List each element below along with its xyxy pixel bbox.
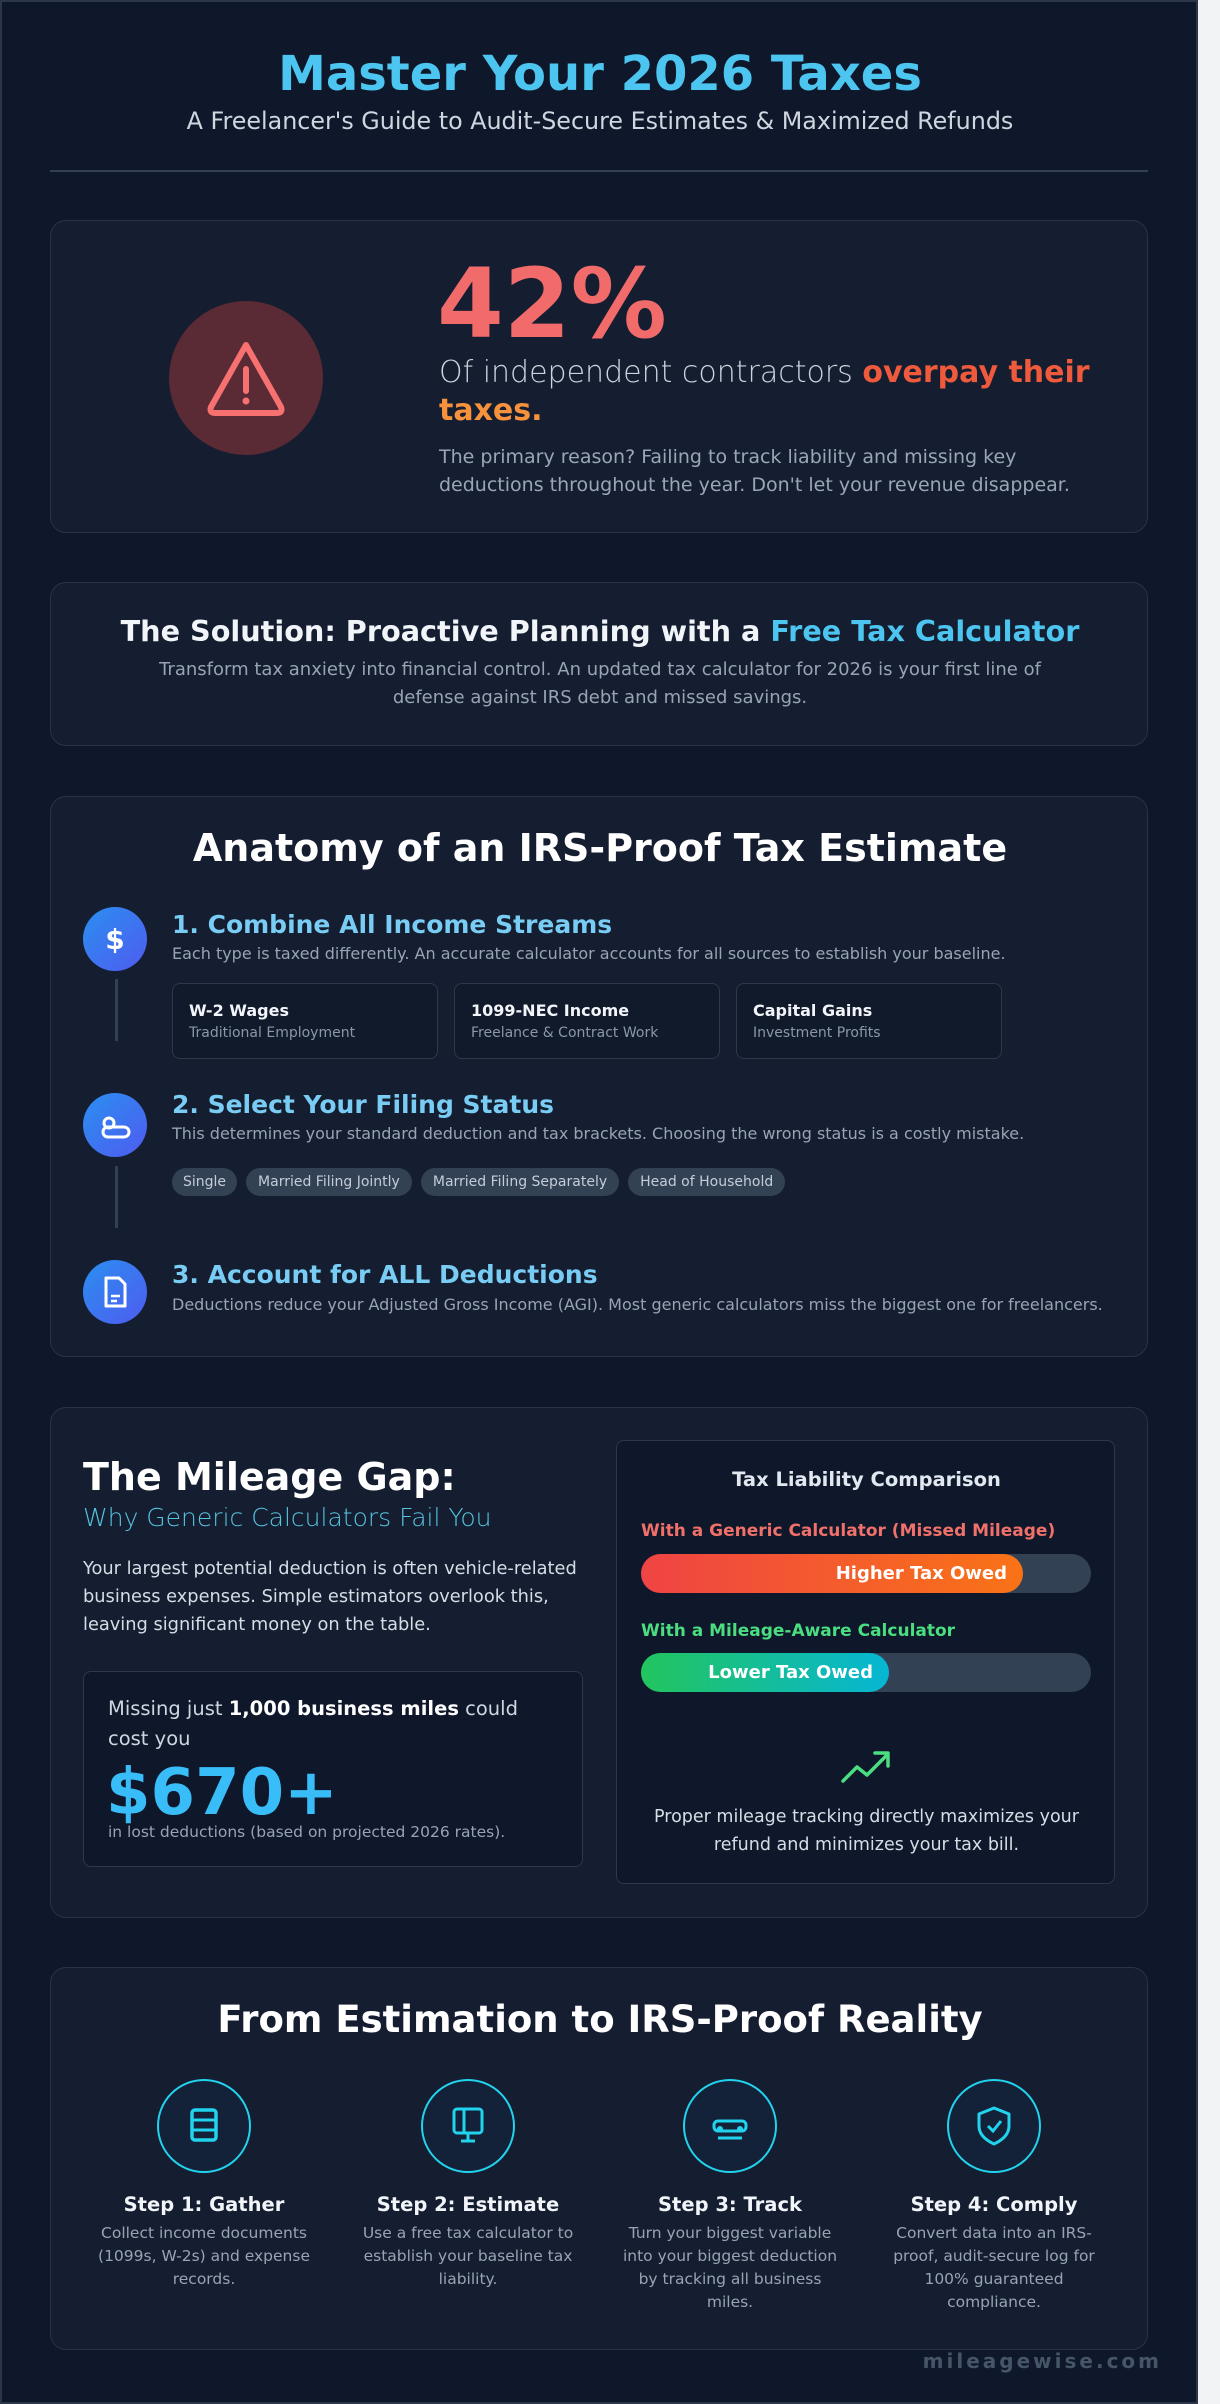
step: gather: Step 1: Gather — [124, 2193, 284, 2216]
pills — [172, 1168, 785, 1196]
step 1 — [83, 907, 1006, 1059]
step: estimate: Use a free tax calculator to establish your baseline tax liability. — [363, 2224, 573, 2288]
icon: warning — [169, 301, 323, 455]
step 3 — [83, 1260, 1103, 1324]
step: comply: Convert data into an IRS-proof, audit-secure log for 100% guaranteed compliance. — [893, 2224, 1095, 2311]
box: W-2: Traditional Employment — [189, 1025, 355, 1041]
box: 1099: Freelance & Contract Work — [471, 1025, 658, 1041]
pills: Married Filing Jointly — [258, 1174, 400, 1190]
box: 1099 — [454, 983, 720, 1059]
mileage subheading: Why Generic Calculators Fail You — [83, 1503, 491, 1532]
heading: 3. Account for ALL Deductions — [172, 1260, 598, 1289]
description: Deductions reduce your Adjusted Gross Income (AGI). Most generic calculators miss the biggest one for freelancers. — [172, 1295, 1103, 1314]
callout: $670: Missing just 1,000 business miles could cost you — [108, 1697, 518, 1750]
chart: tax liability comparison: Proper mileage tracking directly maximizes your refund and minimizes your tax bill. — [654, 1807, 1079, 1855]
bar: lower: Lower Tax Owed — [708, 1662, 873, 1683]
pills: Single — [183, 1174, 226, 1190]
pills: Head of Household — [640, 1174, 773, 1190]
panel: mileage gap — [50, 1407, 1148, 1918]
step: gather — [98, 2079, 310, 2288]
step: estimate: Step 2: Estimate — [377, 2193, 559, 2216]
box: 1099: 1099-NEC Income — [471, 1001, 629, 1020]
panel: steps — [50, 1967, 1148, 2350]
callout: $670: in lost deductions (based on projected 2026 rates). — [108, 1823, 505, 1841]
bar: higher — [641, 1554, 1091, 1593]
heading: 1. Combine All Income Streams — [172, 910, 612, 939]
bar: higher: Higher Tax Owed — [836, 1563, 1007, 1584]
watermark: mileagewise.com — [923, 2349, 1162, 2373]
step: comply: Step 4: Comply — [911, 2193, 1077, 2216]
icon: income: $ — [105, 923, 125, 956]
steps heading: From Estimation to IRS-Proof Reality — [217, 1998, 983, 2041]
mileage heading: The Mileage Gap: — [83, 1455, 456, 1499]
panel: anatomy — [50, 796, 1148, 1357]
icon: trend up — [841, 1751, 890, 1783]
box: capital gains: Capital Gains — [753, 1001, 872, 1020]
icon: income — [83, 907, 147, 971]
panel: solution — [50, 582, 1148, 746]
callout: $670 — [83, 1671, 583, 1867]
subtitle: A Freelancer's Guide to Audit-Secure Estimates & Maximized Refunds — [187, 107, 1013, 135]
step: estimate — [363, 2079, 573, 2288]
description: This determines your standard deduction and tax brackets. Choosing the wrong status is a costly mistake. — [172, 1124, 1024, 1143]
heading: 2. Select Your Filing Status — [172, 1090, 554, 1119]
chart: tax liability comparison — [616, 1440, 1115, 1884]
stat paragraph: The primary reason? Failing to track liability and missing key deductions throughout the year. Don't let your revenue disappear. — [439, 446, 1070, 496]
anatomy heading: Anatomy of an IRS-Proof Tax Estimate — [193, 826, 1007, 870]
chart: tax liability comparison: With a Mileage-Aware Calculator — [641, 1621, 955, 1641]
bar: lower — [641, 1653, 1091, 1692]
box: W-2: W-2 Wages — [189, 1001, 289, 1020]
callout: $670: $670+ — [106, 1756, 338, 1830]
stat: 42%: 42% — [437, 248, 667, 360]
box: capital gains: Investment Profits — [753, 1025, 881, 1041]
icon: document — [83, 1260, 147, 1324]
mileage paragraph: Your largest potential deduction is often vehicle-related business expenses. Simple estimators overlook this, leaving significant money on the table. — [83, 1558, 577, 1635]
solution heading: The Solution: Proactive Planning with a Free Tax Calculator — [121, 614, 1079, 648]
step: track: Turn your biggest variable into your biggest deduction by tracking all business miles. — [623, 2224, 837, 2311]
description: Each type is taxed differently. An accurate calculator accounts for all sources to establish your baseline. — [172, 944, 1006, 963]
step: gather: Collect income documents (1099s, W-2s) and expense records. — [98, 2224, 310, 2288]
panel: 42% stat — [50, 220, 1148, 533]
step: track: Step 3: Track — [658, 2193, 802, 2216]
pills: Married Filing Separately — [433, 1174, 607, 1190]
stat text: Of independent contractors overpay their taxes. — [439, 355, 1090, 428]
solution text: Transform tax anxiety into financial control. An updated tax calculator for 2026 is your first line of defense against IRS debt and missed savings. — [159, 659, 1041, 708]
chart: tax liability comparison: With a Generic Calculator (Missed Mileage) — [641, 1521, 1055, 1541]
step: comply — [893, 2079, 1095, 2311]
title: Master Your 2026 Taxes — [278, 46, 922, 102]
icon: filing — [83, 1093, 147, 1157]
step 2 — [83, 1090, 1024, 1196]
step: track — [623, 2079, 837, 2311]
box: W-2 — [172, 983, 438, 1059]
box: capital gains — [736, 983, 1002, 1059]
chart: tax liability comparison: Tax Liability Comparison — [732, 1468, 1001, 1491]
